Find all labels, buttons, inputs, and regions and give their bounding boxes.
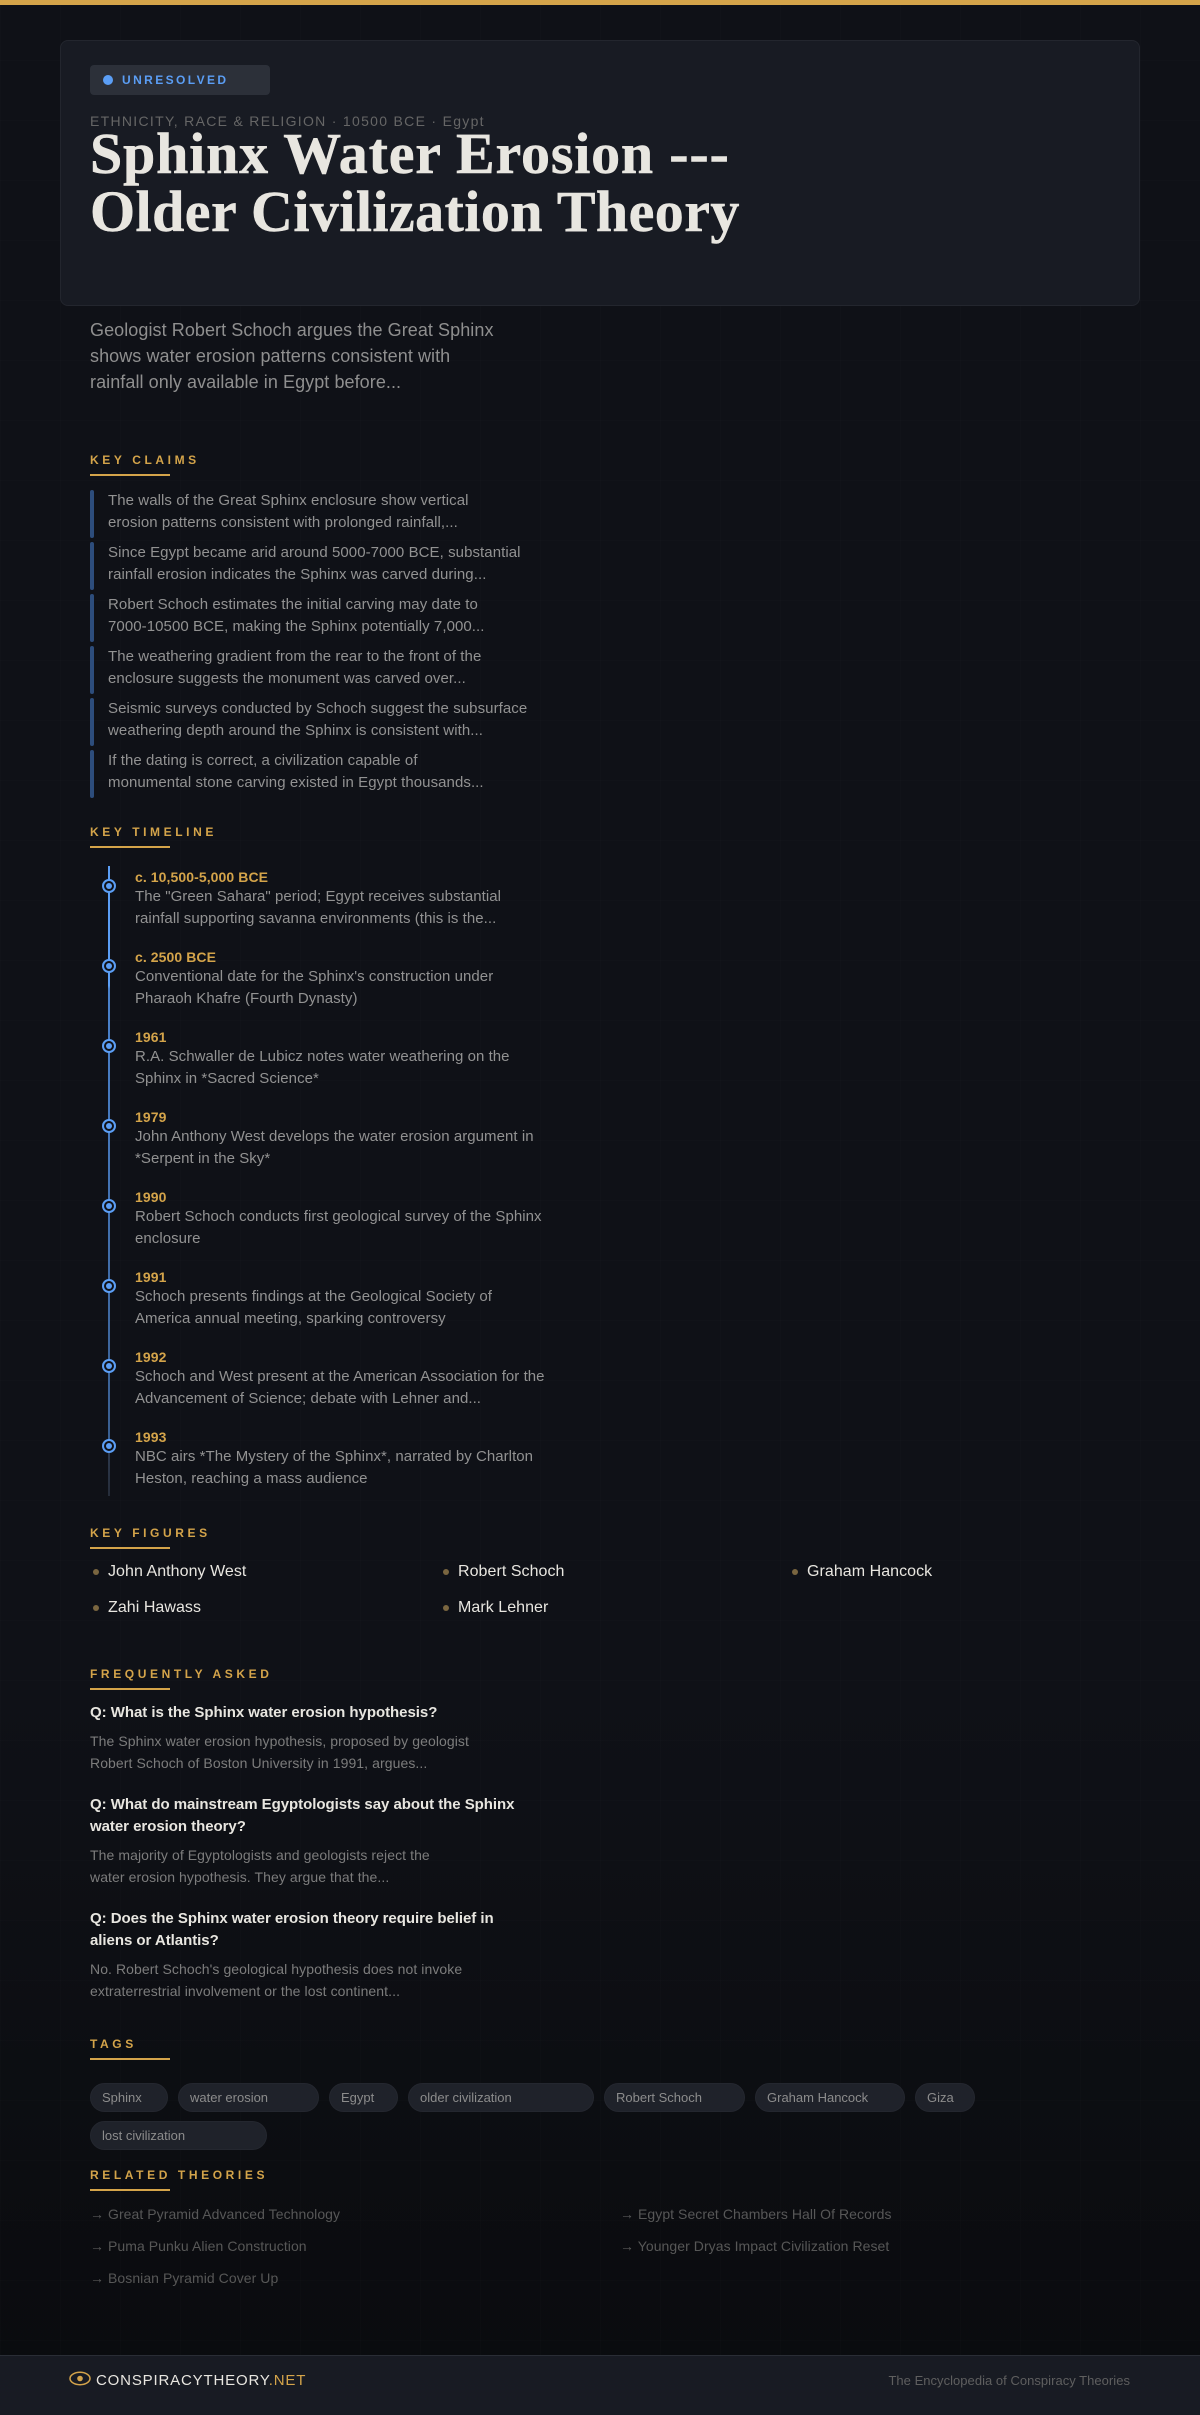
tag: Sphinx [102,2090,142,2105]
heading: frequently asked: FREQUENTLY ASKED [90,1667,273,1681]
answer 3: No. Robert Schoch's geological hypothesis does not invoke [90,1961,462,1977]
claim 3: Robert Schoch estimates the initial carving may date to [108,596,478,613]
claim 6 [90,750,484,798]
claim 3: 7000-10500 BCE, making the Sphinx potentially 7,000... [108,618,485,635]
claim 5 [90,698,527,746]
tag: Graham Hancock [767,2090,868,2105]
event: c. 10,500-5,000 BCE: The "Green Sahara" period; Egypt receives substantial [135,888,501,905]
claim 1 [90,490,469,538]
question 1: Q: What is the Sphinx water erosion hypothesis? [90,1704,437,1721]
figure: John Anthony West: John Anthony West [108,1563,246,1580]
event: 1961 [102,1029,510,1087]
event: c. 10,500-5,000 BCE: c. 10,500-5,000 BCE [135,869,268,885]
panel: key claims list [90,490,527,798]
panel: related theories [90,2206,892,2286]
event: c. 10,500-5,000 BCE: rainfall supporting savanna environments (this is the... [135,910,496,927]
claim 6: If the dating is correct, a civilization capable of [108,752,418,769]
claim 2: rainfall erosion indicates the Sphinx was carved during... [108,566,486,583]
heading: key timeline: KEY TIMELINE [90,825,217,839]
tag: Giza [927,2090,954,2105]
summary text: shows water erosion patterns consistent with [90,346,450,366]
meta line: ETHNICITY, RACE & RELIGION · 10500 BCE · Egypt [90,113,485,129]
question 3: Q: Does the Sphinx water erosion theory require belief in [90,1910,494,1927]
event: 1961: 1961 [135,1029,166,1045]
question 2 [90,1796,514,1835]
timeline [102,866,545,1496]
claim 4: enclosure suggests the monument was carved over... [108,670,466,687]
figure: Graham Hancock: Graham Hancock [807,1563,932,1580]
event: 1993: 1993 [135,1429,166,1445]
event: 1991: America annual meeting, sparking controversy [135,1310,446,1327]
event: 1990: 1990 [135,1189,166,1205]
panel: FAQ [90,1704,514,1999]
event: 1979 [102,1109,534,1167]
tag [90,2121,267,2150]
heading: related theories: RELATED THEORIES [90,2168,268,2182]
footer tagline: The Encyclopedia of Conspiracy Theories [888,2373,1130,2388]
heading: key figures: KEY FIGURES [90,1526,211,1540]
claim 3 [90,594,485,642]
claim 2 [90,542,521,590]
claim 5: weathering depth around the Sphinx is consistent with... [108,722,483,739]
panel: key figures [93,1563,932,1616]
related link: → Younger Dryas Impact Civilization Reset [620,2238,889,2254]
event: c. 10,500-5,000 BCE [102,869,501,927]
event: 1979: *Serpent in the Sky* [135,1150,270,1167]
status badge [90,65,270,95]
event: 1993 [102,1429,533,1487]
tag: Robert Schoch [616,2090,702,2105]
panel: tags [90,2083,975,2150]
related link: → Great Pyramid Advanced Technology [90,2206,340,2222]
event: c. 2500 BCE: Conventional date for the Sphinx's construction under [135,968,493,985]
event: 1992 [102,1349,545,1407]
tag [915,2083,975,2112]
event: 1979: John Anthony West develops the water erosion argument in [135,1128,534,1145]
claim 6: monumental stone carving existed in Egypt thousands... [108,774,484,791]
tag [90,2083,168,2112]
event: c. 2500 BCE [102,949,493,1007]
icon: status dot [103,75,113,85]
tag: Egypt [341,2090,374,2105]
claim 1: The walls of the Great Sphinx enclosure show vertical [108,492,469,509]
tag [604,2083,745,2112]
claim 1: erosion patterns consistent with prolonged rainfall,... [108,514,458,531]
panel: hero [60,40,1140,306]
event: 1992: Schoch and West present at the American Association for the [135,1368,545,1385]
summary text: Geologist Robert Schoch argues the Great Sphinx [90,320,494,340]
figure: Zahi Hawass: Zahi Hawass [108,1599,201,1616]
tag: water erosion [190,2090,268,2105]
summary text [90,320,494,392]
tag: lost civilization [102,2128,185,2143]
logo wordmark: CONSPIRACYTHEORY.NET [96,2372,306,2389]
question 3 [90,1910,494,1949]
tag [755,2083,905,2112]
event: 1990 [102,1189,542,1247]
answer 1 [90,1733,469,1771]
event: 1990: Robert Schoch conducts first geological survey of the Sphinx [135,1208,542,1225]
question 2: water erosion theory? [90,1818,246,1835]
question 3: aliens or Atlantis? [90,1932,219,1949]
answer 1: The Sphinx water erosion hypothesis, proposed by geologist [90,1733,469,1749]
title [90,121,740,244]
answer 3 [90,1961,462,1999]
tag [329,2083,398,2112]
event: 1993: NBC airs *The Mystery of the Sphinx*, narrated by Charlton [135,1448,533,1465]
answer 2 [90,1847,430,1885]
question 2: Q: What do mainstream Egyptologists say about the Sphinx [90,1796,514,1813]
icon: eye logo [69,2372,91,2386]
footer [0,2355,1200,2415]
event: 1961: R.A. Schwaller de Lubicz notes water weathering on the [135,1048,510,1065]
event: 1961: Sphinx in *Sacred Science* [135,1070,319,1087]
event: 1990: enclosure [135,1230,200,1247]
heading: key claims: KEY CLAIMS [90,453,200,467]
claim 2: Since Egypt became arid around 5000-7000 BCE, substantial [108,544,521,561]
answer 2: water erosion hypothesis. They argue that the... [90,1869,389,1885]
tag: older civilization [420,2090,512,2105]
event: 1979: 1979 [135,1109,166,1125]
event: 1993: Heston, reaching a mass audience [135,1470,368,1487]
event: 1992: 1992 [135,1349,166,1365]
event: 1992: Advancement of Science; debate with Lehner and... [135,1390,481,1407]
answer 1: Robert Schoch of Boston University in 1991, argues... [90,1755,427,1771]
related link: → Puma Punku Alien Construction [90,2238,307,2254]
answer 2: The majority of Egyptologists and geologists reject the [90,1847,430,1863]
event: 1991: Schoch presents findings at the Geological Society of [135,1288,492,1305]
tag [178,2083,319,2112]
figure: Robert Schoch: Robert Schoch [458,1563,564,1580]
claim 5: Seismic surveys conducted by Schoch suggest the subsurface [108,700,527,717]
timeline axis [108,866,110,1496]
heading: tags: TAGS [90,2037,137,2051]
claim 4 [90,646,481,694]
related link: → Egypt Secret Chambers Hall Of Records [620,2206,892,2222]
event: c. 2500 BCE: c. 2500 BCE [135,949,216,965]
summary text: rainfall only available in Egypt before... [90,372,401,392]
title: Older Civilization Theory [90,179,740,244]
title: Sphinx Water Erosion --- [90,121,730,186]
top accent bar [0,0,1200,5]
answer 3: extraterrestrial involvement or the lost continent... [90,1983,400,1999]
tag [408,2083,594,2112]
event: 1991: 1991 [135,1269,166,1285]
related link: → Bosnian Pyramid Cover Up [90,2270,278,2286]
figure: Mark Lehner: Mark Lehner [458,1599,548,1616]
event: c. 2500 BCE: Pharaoh Khafre (Fourth Dynasty) [135,990,358,1007]
badge label: UNRESOLVED [122,73,228,87]
claim 4: The weathering gradient from the rear to the front of the [108,648,481,665]
event: 1991 [102,1269,492,1327]
